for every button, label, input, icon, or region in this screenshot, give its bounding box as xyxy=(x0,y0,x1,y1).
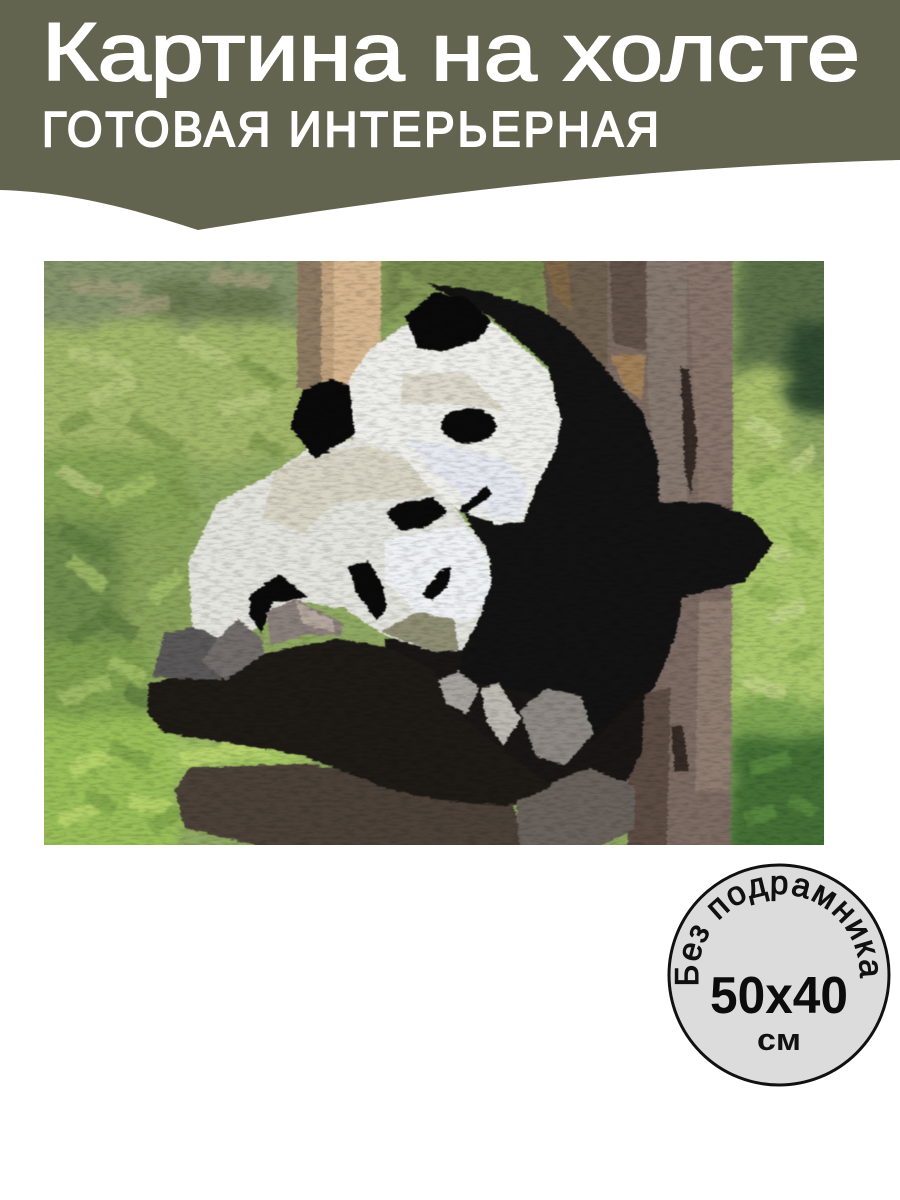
lower panda body xyxy=(188,436,492,652)
lower log xyxy=(175,764,528,847)
dark branch xyxy=(148,639,552,805)
pandas and tree xyxy=(148,256,773,851)
main tree trunk xyxy=(542,256,733,851)
upper panda head xyxy=(348,317,561,525)
painting background: brush dabs xyxy=(60,275,815,830)
black body of upper panda xyxy=(427,282,774,694)
pale back trunk xyxy=(297,256,381,389)
subtitle: ГОТОВАЯ ИНТЕРЬЕРНАЯ xyxy=(42,103,659,157)
badge caption: Без подрамника xyxy=(674,876,878,984)
grey claws of upper panda xyxy=(438,671,594,766)
size value: 50x40 xyxy=(710,967,848,1025)
dark underlay behind claws and branch xyxy=(385,639,646,805)
painting background: green foliage xyxy=(44,261,824,845)
grey paws of lower panda xyxy=(152,599,344,680)
panda ears and eyes xyxy=(249,292,496,633)
painting: two pandas on a tree xyxy=(44,261,824,845)
title: Картина на холсте xyxy=(42,7,860,98)
size badge xyxy=(668,864,890,1086)
header banner xyxy=(0,0,900,230)
canvas brush texture xyxy=(44,261,824,845)
grey rock at base xyxy=(516,768,635,849)
size unit: см xyxy=(757,1022,801,1057)
curved label xyxy=(698,894,860,1000)
badge circle xyxy=(669,865,889,1085)
